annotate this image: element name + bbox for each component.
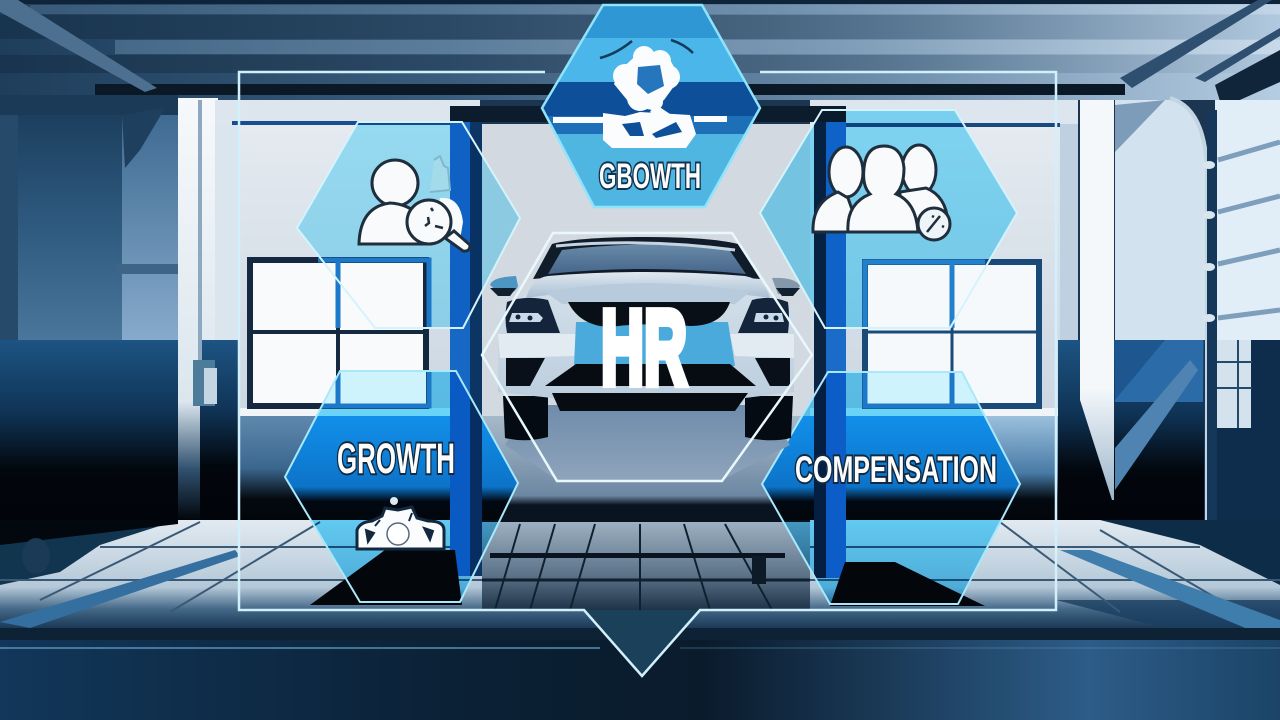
ceiling: [0, 0, 1280, 100]
hexagon outline: person search: [297, 122, 520, 328]
hexagon outline: growth lower left: [285, 371, 518, 605]
hexagon outline: compensation: [762, 372, 1020, 606]
hexagon: compensation floor tint: [762, 372, 1020, 604]
icon: growth emblem: [553, 40, 727, 148]
car lift posts and centre bay: [450, 106, 846, 676]
hexagon: growth floor tint: [285, 371, 518, 602]
hexagon: compensation wall tint: [760, 416, 1026, 520]
windows: [247, 260, 1040, 406]
icon: team of people with gauge: [813, 145, 950, 240]
floor: [0, 520, 1280, 632]
back wall: [239, 124, 1065, 416]
pillar left: [178, 98, 218, 520]
body: [498, 276, 794, 398]
car: [490, 237, 800, 480]
roll-up door: [1215, 100, 1280, 350]
hexagon: team tint: [760, 110, 1017, 328]
intake: [545, 364, 756, 386]
hexagon outline: team: [760, 110, 1017, 328]
icon: person with magnifier: [359, 156, 470, 251]
hood: [526, 272, 770, 298]
roof and windshield: [533, 237, 760, 279]
bumper lower: [552, 393, 748, 411]
blue gap behind grille: [574, 322, 735, 366]
grille: [568, 302, 730, 327]
left bay: [0, 115, 18, 340]
mirrors: [490, 276, 518, 294]
hexagon: growth wall tint: [286, 416, 517, 520]
hexagon: person search tint: [297, 122, 520, 328]
label: growth top: GBOWTH: [599, 157, 701, 196]
hexagon: top growth: [540, 0, 762, 210]
outer frame with pointer: [239, 72, 1056, 676]
label: HR: HR: [601, 289, 687, 407]
headlights: [506, 298, 560, 333]
icon: small growth emblem: [357, 497, 444, 549]
hexagon: center HR: [482, 233, 812, 481]
wheels: [503, 396, 548, 440]
white side panels: [498, 334, 578, 358]
label: compensation: COMPENSATION: [795, 449, 997, 490]
label: growth: GROWTH: [337, 435, 455, 483]
right pillar and wall: [1058, 340, 1204, 526]
car underside: [505, 405, 790, 480]
ceiling beams: [0, 0, 157, 92]
